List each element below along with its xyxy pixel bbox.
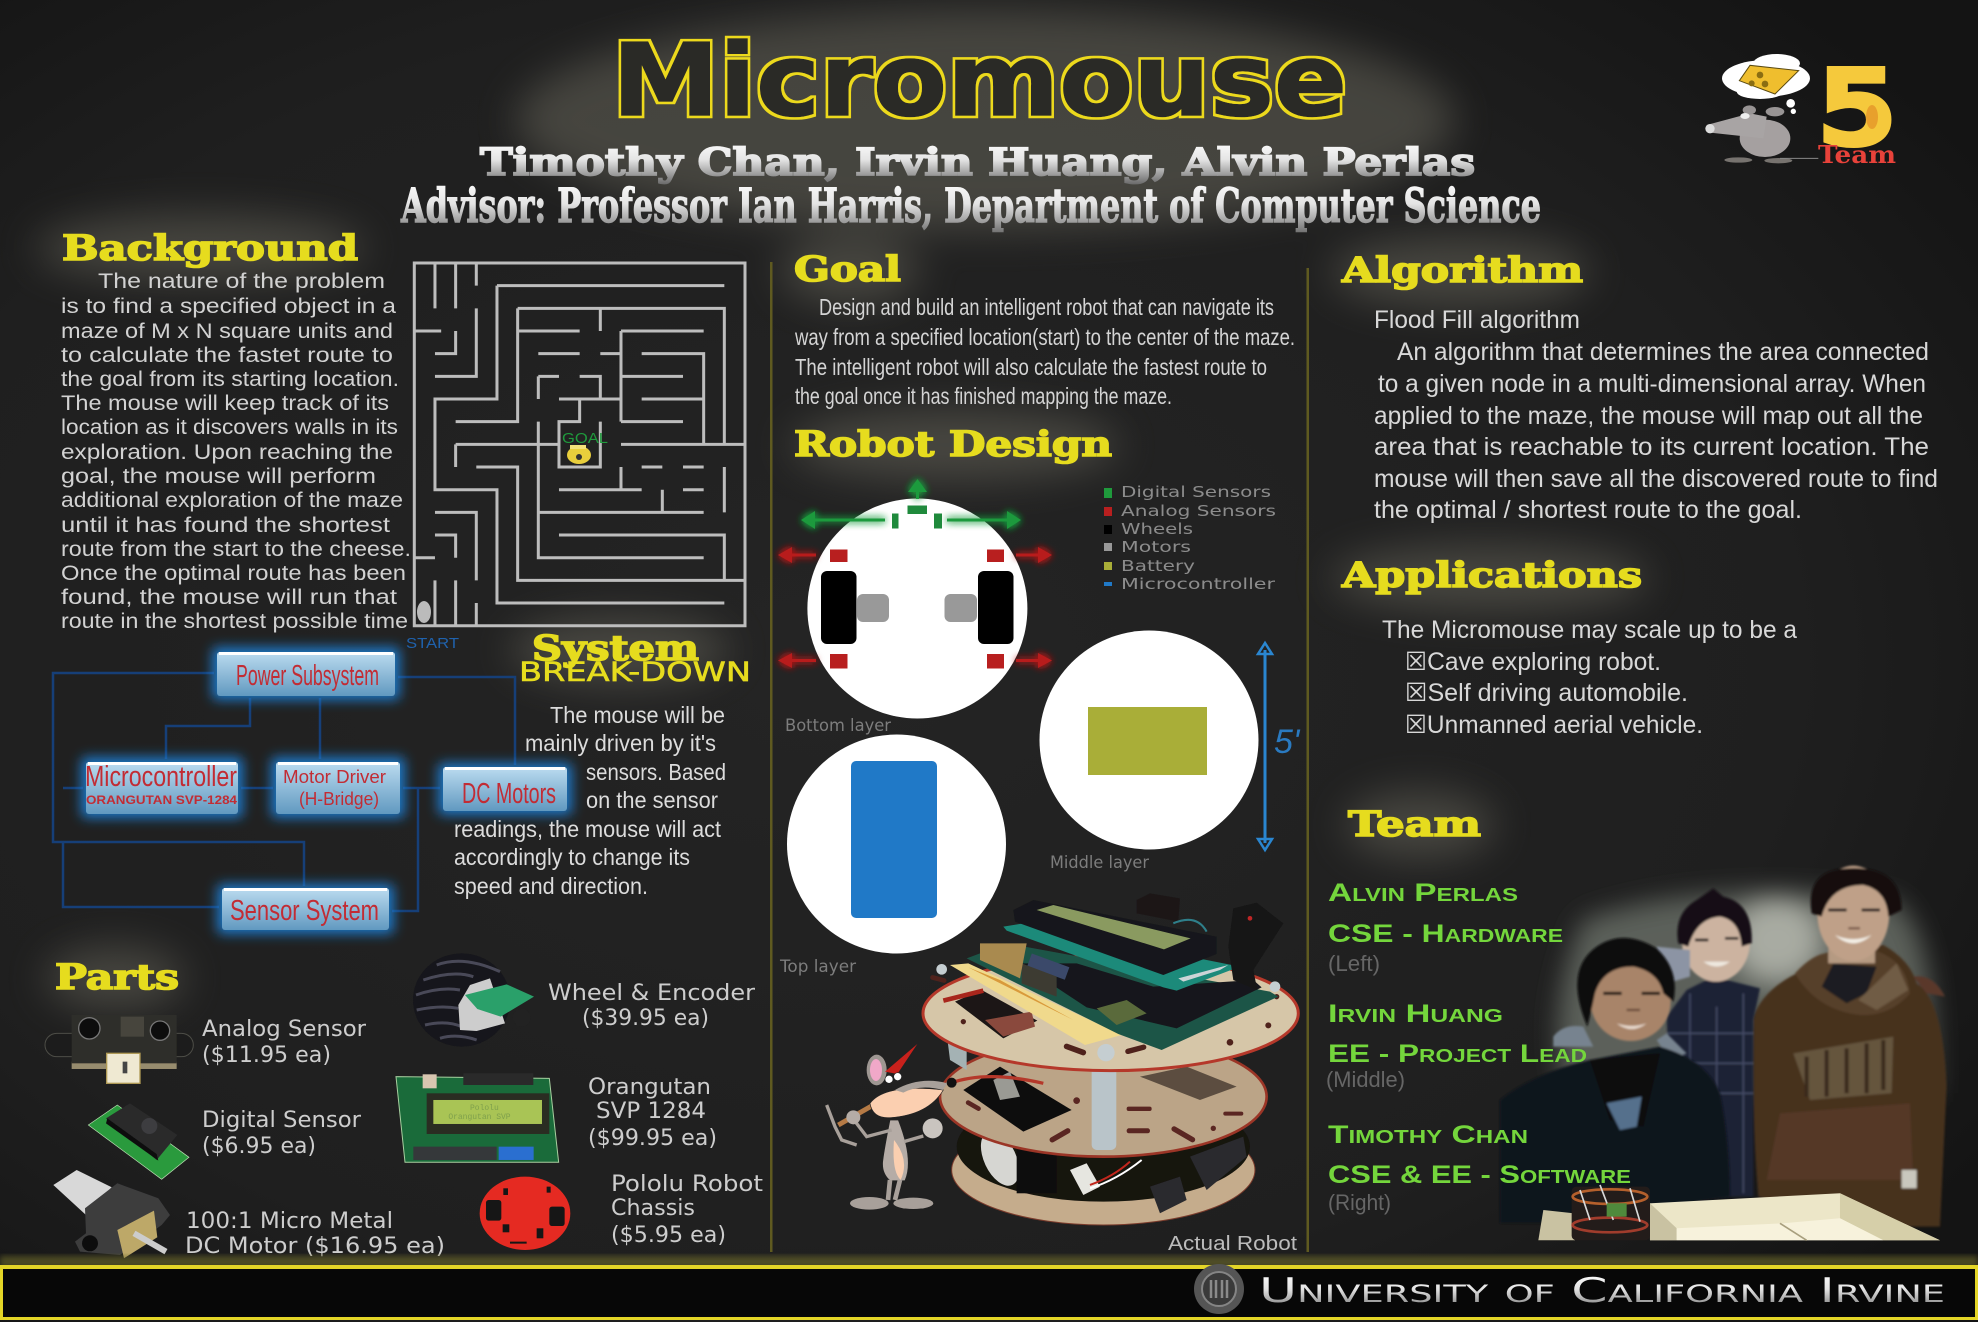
part: analog sensor: Analog Sensor	[202, 1017, 367, 1042]
start label: START	[406, 635, 459, 652]
caption: Actual Robot	[1168, 1233, 1297, 1255]
text block: mainly driven by it's	[525, 730, 716, 756]
team member list	[1326, 879, 1631, 1215]
text block: The mouse will be	[550, 702, 725, 728]
team member list: (Right)	[1328, 1190, 1391, 1215]
icon: wheel	[413, 953, 534, 1047]
team label: Team	[1818, 140, 1896, 169]
icon: start mouse	[417, 601, 431, 623]
lcd	[1013, 900, 1217, 975]
right person	[1752, 866, 1947, 1227]
legend	[1104, 483, 1276, 593]
text block: to a given node in a multi-dimensional array. When	[1378, 370, 1926, 398]
part: orangutan board	[396, 1073, 717, 1162]
legend: Digital Sensors	[1121, 483, 1271, 501]
icon: red chassis	[480, 1177, 570, 1250]
text block: speed and direction.	[454, 873, 648, 899]
battery	[1088, 707, 1207, 775]
box: power subsystem: Power Subsystem	[236, 660, 379, 692]
box: microcontroller: Microcontroller	[85, 761, 237, 793]
text block: ☒Cave exploring robot.	[1405, 648, 1661, 676]
backdrop	[1558, 892, 1934, 1093]
box: motor driver: Motor Driver	[283, 767, 386, 787]
text block: is to find a specified object in a	[61, 295, 396, 318]
text block: The intelligent robot will also calculate the fastest route to	[795, 354, 1267, 380]
part: dc motor: DC Motor ($16.95 ea)	[185, 1234, 445, 1259]
wheel and motor	[973, 1125, 1027, 1192]
text block: readings, the mouse will act	[454, 816, 721, 842]
icon: digital sensor	[88, 1103, 189, 1179]
text block: way from a specified location(start) to the center of the maze.	[794, 324, 1295, 350]
text block: on the sensor	[586, 787, 718, 813]
text block: maze of M x N square units and	[61, 320, 393, 343]
box: motor driver	[276, 762, 400, 814]
part: wheel and encoder	[413, 953, 756, 1047]
photo: actual robot	[923, 893, 1298, 1225]
title: Micromouse	[612, 22, 1347, 139]
box: sensor system: Sensor System	[230, 895, 379, 927]
text block: ☒Unmanned aerial vehicle.	[1405, 711, 1703, 739]
icon: controller board	[396, 1073, 559, 1162]
panel: robot design	[778, 424, 1301, 1255]
caption: Bottom layer	[785, 716, 891, 736]
text block	[454, 702, 726, 899]
text block: area that is reachable to its current location. The	[1374, 433, 1929, 461]
block diagram	[53, 647, 572, 934]
icon: cartoon mouse	[827, 1044, 957, 1210]
icon: goal cheese mouse	[567, 445, 591, 464]
photo: team members	[1500, 866, 1947, 1240]
caption: Top layer	[779, 957, 856, 977]
middle plate	[940, 1037, 1267, 1157]
arrow: height dimension: 5'	[1274, 723, 1301, 761]
circuit board	[967, 943, 1278, 1050]
box: dc motors: DC Motors	[462, 778, 556, 810]
part: robot chassis: Chassis	[611, 1196, 695, 1221]
panel: applications	[1341, 555, 1797, 739]
bottom plate	[952, 1115, 1255, 1225]
text block: The mouse will keep track of its	[61, 392, 389, 415]
middle person	[1657, 888, 1760, 1197]
legend: Analog Sensors	[1121, 502, 1276, 520]
heading: Background	[62, 228, 358, 269]
icon: thought bubble	[1722, 54, 1810, 114]
text block: the goal from its starting location.	[61, 368, 399, 391]
panel: goal	[794, 249, 1295, 409]
maze model	[1650, 1193, 1940, 1240]
text block: exploration. Upon reaching the	[61, 441, 393, 464]
part: robot chassis: ($5.95 ea)	[611, 1223, 726, 1248]
part: wheel and encoder: ($39.95 ea)	[582, 1006, 709, 1031]
box: microcontroller: ORANGUTAN SVP-1284	[86, 793, 237, 807]
legend: Microcontroller	[1121, 575, 1276, 593]
panel: team	[1326, 804, 1947, 1240]
heading: System	[532, 628, 699, 669]
small robot	[1538, 1185, 1650, 1240]
part: digital sensor: Digital Sensor	[202, 1108, 362, 1133]
part: analog sensor: ($11.95 ea)	[202, 1043, 331, 1068]
team member list: Irvin Huang	[1328, 1000, 1503, 1028]
icon: dc motor	[53, 1170, 170, 1258]
university name: University of California Irvine	[1259, 1271, 1945, 1311]
part: orangutan board: SVP 1284	[596, 1099, 706, 1124]
icon: controller board: Orangutan SVP	[448, 1113, 511, 1122]
text block: the optimal / shortest route to the goal.	[1374, 496, 1802, 524]
text block	[61, 270, 411, 633]
part: robot chassis	[480, 1172, 763, 1250]
icon: university seal	[1194, 1264, 1244, 1314]
microcontroller	[851, 761, 937, 918]
text block: route in the shortest possible time	[61, 610, 408, 633]
box: microcontroller	[85, 761, 238, 814]
team member list: EE - Project Lead	[1328, 1040, 1587, 1068]
box: power subsystem	[217, 652, 395, 696]
team member list: CSE & EE - Software	[1328, 1161, 1631, 1189]
part: dc motor: 100:1 Micro Metal	[186, 1209, 393, 1234]
icon: grey mouse	[1705, 105, 1818, 163]
text block: Once the optimal route has been	[61, 562, 406, 585]
legend: Motors	[1121, 538, 1191, 556]
part: digital sensor	[88, 1103, 362, 1179]
head	[870, 1088, 943, 1118]
arrow: height dimension	[1258, 643, 1301, 850]
text block: the goal once it has finished mapping the maze.	[795, 383, 1172, 409]
part: analog sensor	[45, 1015, 367, 1083]
logo: team 5 mouse and cheese	[1705, 47, 1898, 170]
panel: parts	[45, 953, 763, 1259]
text block: Flood Fill algorithm	[1374, 306, 1580, 334]
text block: sensors. Based	[586, 759, 726, 785]
text block: applied to the maze, the mouse will map out all the	[1374, 402, 1923, 430]
icon: analog sensor	[45, 1015, 193, 1083]
panel: background	[61, 228, 411, 633]
part: digital sensor: ($6.95 ea)	[202, 1134, 316, 1159]
text block: An algorithm that determines the area connected	[1397, 338, 1929, 366]
subheading: BREAK-DOWN	[519, 657, 751, 688]
panel: algorithm	[1341, 250, 1938, 524]
text block	[1382, 616, 1797, 739]
authors: Timothy Chan, Irvin Huang, Alvin Perlas	[480, 140, 1475, 184]
goal label: GOAL	[562, 430, 608, 447]
text block: accordingly to change its	[454, 844, 690, 870]
text block: additional exploration of the maze	[61, 489, 403, 512]
diagram: top layer	[779, 734, 1006, 977]
icon: controller board: Pololu	[470, 1104, 499, 1113]
part: orangutan board: ($99.95 ea)	[588, 1126, 717, 1151]
teal board	[1003, 923, 1240, 991]
part: dc motor	[53, 1170, 445, 1259]
digital sensor arrows	[801, 479, 1021, 529]
team member list: CSE - Hardware	[1328, 920, 1563, 948]
text block: mouse will then save all the discovered route to find	[1374, 465, 1938, 493]
text block: goal, the mouse will perform	[61, 465, 376, 488]
text block: Design and build an intelligent robot that can navigate its	[819, 294, 1274, 320]
arms	[854, 1120, 923, 1142]
analog sensors	[830, 550, 848, 562]
body	[883, 1120, 908, 1181]
part: wheel and encoder: Wheel & Encoder	[548, 981, 756, 1006]
text block	[794, 294, 1295, 409]
diagram: middle layer	[1040, 630, 1258, 873]
caption: Middle layer	[1050, 853, 1149, 873]
text block: to calculate the fastet route to	[61, 344, 393, 367]
box: sensor system	[222, 888, 389, 930]
standoff	[1092, 1067, 1116, 1150]
text block: ☒Self driving automobile.	[1405, 679, 1688, 707]
diagram: bottom layer	[778, 479, 1052, 736]
wheels	[821, 571, 856, 644]
connectors	[53, 673, 515, 911]
left person	[1500, 938, 1730, 1223]
circle	[807, 498, 1027, 718]
analog sensor arrows	[778, 547, 1052, 668]
text block: until it has found the shortest	[61, 514, 390, 537]
text block: The nature of the problem	[98, 270, 385, 293]
legend: Battery	[1121, 557, 1195, 575]
motors	[857, 594, 889, 622]
top plate	[923, 956, 1298, 1071]
team member list: Timothy Chan	[1328, 1121, 1528, 1149]
sensors	[1228, 903, 1283, 990]
box: dc motors	[443, 767, 567, 811]
text block: location as it discovers walls in its	[61, 416, 398, 439]
cream strip	[950, 963, 1122, 1045]
text block: found, the mouse will run that	[61, 586, 397, 609]
glow behind boxes	[81, 647, 572, 934]
box: motor driver: (H-Bridge)	[299, 789, 379, 809]
maze	[406, 263, 745, 652]
text block	[1374, 306, 1938, 524]
heading: Goal	[794, 249, 901, 290]
part: orangutan board: Orangutan	[588, 1075, 711, 1100]
heading: Team	[1348, 804, 1481, 845]
part: robot chassis: Pololu Robot	[611, 1172, 763, 1197]
team member list: Alvin Perlas	[1328, 879, 1518, 907]
icon: cheese five: 5	[1816, 47, 1898, 170]
heading: Applications	[1341, 555, 1642, 596]
panel: system break-down	[53, 628, 751, 934]
team member list: (Left)	[1328, 951, 1380, 976]
legend: Wheels	[1121, 520, 1193, 538]
feet	[850, 1197, 889, 1210]
hammer and flailing mouse	[838, 1105, 873, 1125]
ear	[867, 1055, 887, 1085]
text block: The Micromouse may scale up to be a	[1382, 616, 1797, 644]
footer bar	[0, 1256, 1978, 1318]
heading: Robot Design	[794, 424, 1112, 465]
heading: Parts	[55, 957, 179, 998]
team member list: (Middle)	[1326, 1067, 1405, 1092]
heading: Algorithm	[1341, 250, 1583, 291]
digital sensors	[908, 506, 927, 514]
text block: route from the start to the cheese.	[61, 538, 411, 561]
